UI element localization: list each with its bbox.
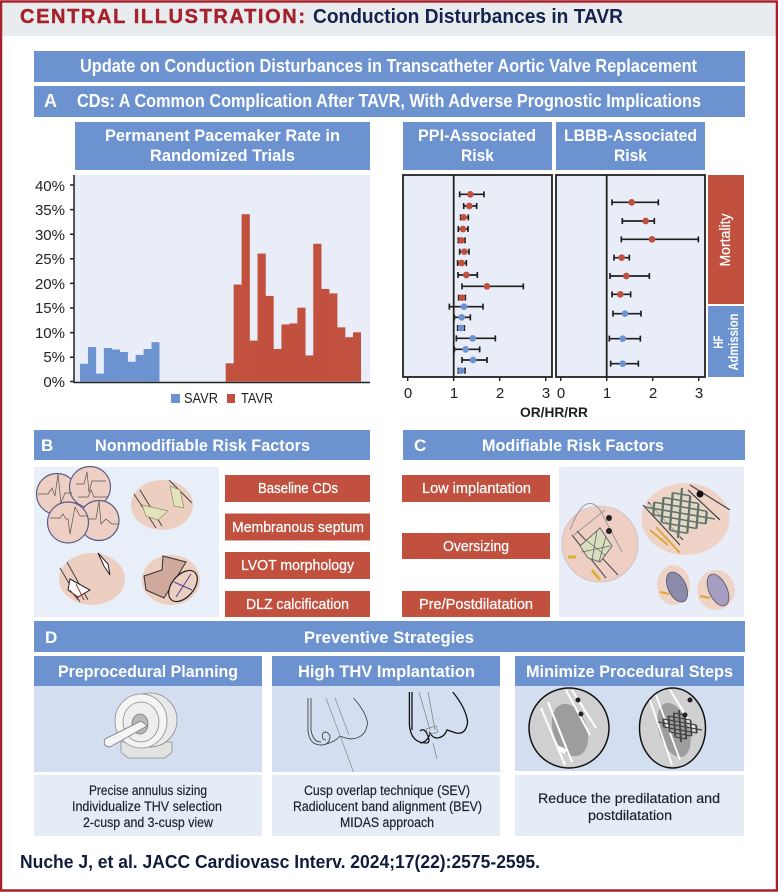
outcome label: HF admission: Admission (725, 314, 741, 370)
icon: valve stent oval (640, 688, 706, 768)
panel: preprocedural planning (34, 656, 262, 772)
section B heading: Nonmodifiable Risk Factors (95, 436, 310, 455)
header band (2, 3, 776, 36)
strategy text panel 2 (272, 775, 500, 836)
header band: CENTRAL ILLUSTRATION: (20, 6, 305, 28)
stent lattice (645, 488, 715, 538)
HF admission estimates (609, 310, 641, 367)
x axis: PPI panel: 3 (542, 385, 550, 402)
red label: DLZ calcification: DLZ calcification (246, 596, 349, 613)
y axis labels: 0% (43, 374, 65, 391)
x axis: LBBB panel: 0 (557, 385, 565, 402)
x axis: PPI panel: 0 (404, 385, 412, 402)
icon: membranous septum anatomy (131, 480, 193, 530)
x axis: LBBB panel: 2 (649, 385, 657, 402)
icon: oversized valve (642, 483, 730, 555)
icon: ECG circles (36, 466, 119, 543)
y axis labels: 10% (35, 325, 65, 342)
heading: permanent pacemaker rate: Permanent Pacemaker Rate in (105, 126, 340, 145)
x axis: LBBB panel: 1 (603, 385, 611, 402)
section D heading: D (45, 628, 57, 647)
icon: LVOT anatomy (59, 553, 125, 605)
chart legend: TAVR (241, 390, 273, 407)
x axis: PPI panel (404, 385, 550, 402)
x axis: LBBB panel: 3 (695, 385, 703, 402)
chart legend (171, 390, 273, 407)
header band: Conduction Disturbances in TAVR (313, 6, 624, 28)
strategy text panel 2: Cusp overlap technique (SEV) (304, 783, 470, 798)
forest plot: LBBB-associated risk (556, 175, 705, 402)
heading: Minimize Procedural Steps (526, 662, 733, 681)
citation: Nuche J, et al. JACC Cardiovasc Interv. 2024;17(22):2575-2595. (20, 852, 540, 872)
x axis: PPI panel: 2 (496, 385, 504, 402)
section C heading: C (414, 436, 426, 455)
icon: LVOT morphology (142, 555, 203, 607)
main title bar: Update on Conduction Disturbances in Transcatheter Aortic Valve Replacement (80, 56, 697, 76)
outcome label: mortality: Mortality (717, 213, 734, 266)
section C heading: Modifiable Risk Factors (482, 436, 664, 455)
red label: LVOT morphology (225, 552, 370, 579)
strategy text panel 3: Reduce the predilatation and (538, 791, 720, 806)
section A heading: CDs: A Common Complication After TAVR, With Adverse Prognostic Implications (77, 91, 701, 111)
icon: CT scanner (104, 693, 177, 758)
red label: baseline CDs (225, 475, 370, 502)
red label: LVOT morphology: LVOT morphology (241, 557, 354, 574)
heading: High THV Implantation (298, 662, 475, 681)
heading (34, 656, 262, 686)
y axis labels: 25% (35, 251, 65, 268)
y axis labels: 15% (35, 300, 65, 317)
heading: LBBB-associated risk: LBBB-Associated (564, 126, 697, 145)
heading: LBBB-associated risk (556, 122, 705, 170)
red label: low implantation (402, 475, 550, 502)
strategy text panel 2: Radiolucent band alignment (BEV) (293, 799, 482, 814)
heading: PPI-associated risk: PPI-Associated (418, 126, 536, 145)
section B heading (34, 430, 370, 460)
stent lattice (658, 710, 702, 742)
bars: TAVR (226, 214, 361, 382)
chart legend: SAVR (184, 390, 218, 407)
strategy text panel 1: Individualize THV selection (72, 799, 222, 814)
red label: oversizing (402, 533, 550, 559)
panel: high THV implantation (272, 656, 500, 772)
panel: minimize procedural steps (515, 656, 744, 771)
x axis: LBBB panel (557, 385, 703, 402)
y axis labels: 20% (35, 276, 65, 293)
section C heading (403, 430, 745, 460)
outcome label: HF admission: HF (710, 335, 726, 348)
red label: DLZ calcification (225, 591, 370, 617)
heading: PPI-associated risk (403, 122, 552, 170)
heading: Preprocedural Planning (58, 662, 238, 681)
heading: permanent pacemaker rate (75, 122, 370, 170)
red label: baseline CDs: Baseline CDs (258, 480, 338, 497)
forest plot: PPI-associated risk (403, 175, 552, 402)
section D heading (34, 621, 745, 652)
heading (272, 656, 500, 686)
bar chart: permanent pacemaker rate (35, 175, 370, 391)
strategy text panel 3 (515, 775, 744, 836)
strategy text panel 1: 2-cusp and 3-cusp view (83, 815, 213, 830)
section A heading (34, 86, 745, 117)
red label: membranous septum (225, 514, 370, 540)
red label: pre/postdilatation (402, 591, 550, 617)
icon: low implantation valve (562, 503, 638, 582)
panel: nonmodifiable illustrations (34, 466, 219, 617)
heading: LBBB-associated risk: Risk (614, 146, 647, 165)
bars: SAVR (80, 342, 160, 382)
heading: PPI-associated risk: Risk (461, 146, 494, 165)
y axis labels (35, 178, 65, 391)
red label: low implantation: Low implantation (422, 480, 531, 497)
icon: cusp sketch, left (308, 698, 368, 772)
icon: cusp sketch, right (409, 692, 468, 759)
y axis labels: 30% (35, 227, 65, 244)
main title bar (34, 51, 745, 82)
icon: balloon dilatation oval (529, 688, 609, 768)
x axis: PPI panel: 1 (450, 385, 458, 402)
HF admission estimates (449, 303, 495, 374)
panel: modifiable illustrations (559, 467, 744, 617)
red label: pre/postdilatation: Pre/Postdilatation (419, 596, 533, 613)
section A heading: A (44, 91, 57, 111)
strategy text panel 3: postdilatation (588, 808, 672, 823)
mortality estimates (458, 191, 523, 301)
section D heading: Preventive Strategies (304, 628, 474, 647)
heading: permanent pacemaker rate: Randomized Trials (150, 146, 295, 165)
mortality estimates (610, 199, 698, 298)
section B heading: B (41, 436, 53, 455)
red label: oversizing: Oversizing (443, 538, 509, 555)
strategy text panel 1 (34, 775, 262, 836)
outcome label: mortality (708, 175, 744, 304)
heading (515, 656, 744, 686)
y axis labels: 40% (35, 178, 65, 195)
strategy text panel 1: Precise annulus sizing (89, 783, 207, 798)
y axis labels: 5% (43, 349, 65, 366)
outcome label: HF admission (708, 306, 744, 377)
y axis labels: 35% (35, 202, 65, 219)
x axis title: OR/HR/RR (520, 404, 588, 420)
strategy text panel 2: MIDAS approach (340, 815, 434, 830)
icon: small balloon circles (657, 565, 735, 610)
red label: membranous septum: Membranous septum (232, 519, 364, 536)
